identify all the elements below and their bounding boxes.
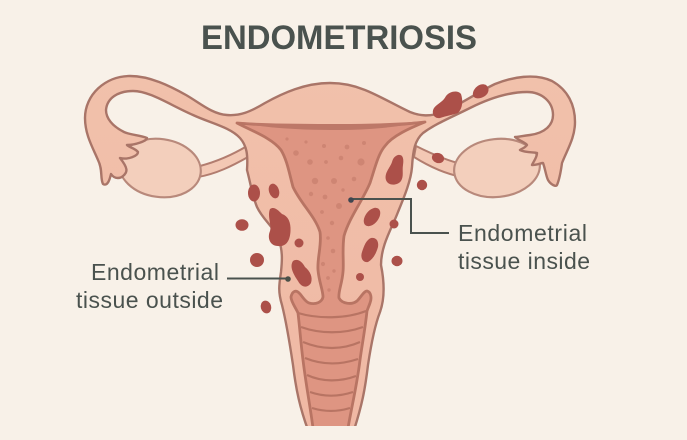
label	[458, 220, 590, 274]
leader line	[348, 197, 449, 233]
label	[76, 259, 223, 313]
top lining band	[237, 121, 425, 130]
vaginal rugae	[298, 311, 366, 411]
bottom cut-off	[290, 426, 370, 440]
callout: endometrial tissue inside	[348, 197, 590, 274]
label: Endometrial	[91, 259, 219, 285]
title: ENDOMETRIOSIS	[201, 19, 477, 57]
label: tissue inside	[458, 248, 590, 274]
endometrial speckles	[285, 137, 366, 292]
endometrial lesions	[236, 84, 489, 315]
diagram: uterus	[85, 76, 575, 440]
callout: endometrial tissue outside	[76, 259, 291, 313]
uterus body with fallopian tubes	[85, 76, 575, 430]
leader line	[227, 276, 291, 282]
label: tissue outside	[76, 287, 223, 313]
label: Endometrial	[458, 220, 587, 246]
icon: right ovary	[414, 135, 543, 201]
uterine cavity, cervix and vaginal canal	[237, 122, 425, 428]
icon: left ovary	[115, 134, 248, 202]
